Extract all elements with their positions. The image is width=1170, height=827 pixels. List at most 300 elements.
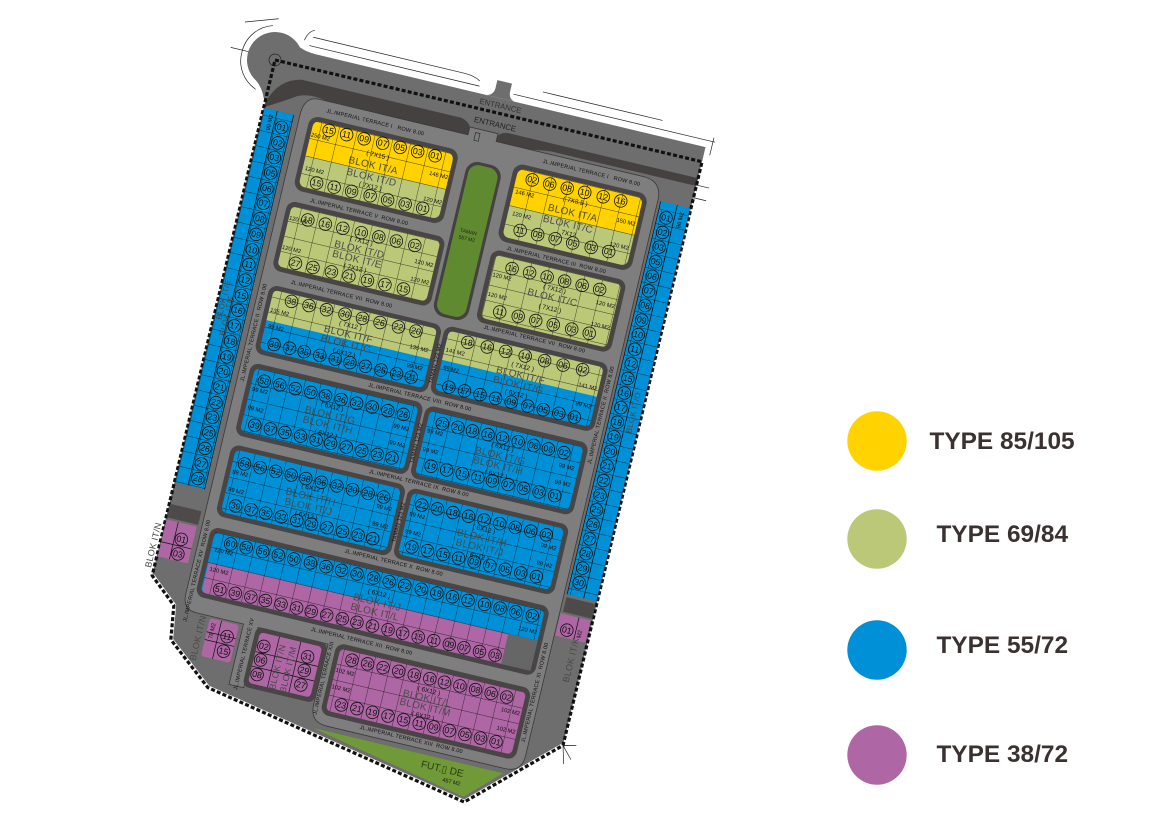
lot numbers: 02	[540, 529, 552, 541]
block: IT/A and IT/C upper right: BLOK IT/A	[547, 202, 598, 225]
lot numbers	[249, 639, 315, 693]
block: IT/A and IT/C upper right: 150 M2	[616, 218, 636, 228]
small block: IT/N lower left: BLOK IT/N	[188, 614, 208, 662]
right strip lot numbers: 10	[632, 329, 644, 341]
road labels: JL.IMPERIAL TERRACE III ROW 8.00	[506, 246, 606, 275]
lot numbers	[246, 374, 411, 466]
block: IT/G and IT/H right: 99 M2	[422, 447, 439, 456]
lot numbers: 29	[344, 357, 356, 369]
lot numbers: 08	[470, 684, 482, 696]
lot numbers: 10	[579, 186, 591, 198]
lot numbers: 06	[485, 687, 497, 699]
legend: type 55/72	[847, 620, 1068, 680]
block: IT/H and IT/J right: 99 M2	[540, 543, 557, 552]
lot numbers: 23	[352, 529, 364, 541]
legend: type 55/72: TYPE 55/72	[936, 632, 1068, 659]
left strip lot numbers: 18	[225, 335, 237, 347]
small block: IT/K right	[545, 613, 591, 684]
lot numbers: 20	[452, 421, 464, 433]
lot numbers: 16	[506, 263, 518, 275]
central park: TAMAN	[459, 228, 478, 237]
block: IT/F and IT/G right: ( 7X12 )	[510, 361, 535, 373]
small block: IT/N lower middle: BLOK IT/M	[278, 646, 298, 694]
left strip lot numbers: 26	[199, 442, 211, 454]
lot numbers: 20	[431, 503, 443, 515]
block: IT/L and IT/M bottom: 102 M2	[331, 684, 351, 695]
block: IT/D and IT/E: BLOK IT/E	[331, 249, 383, 271]
lot numbers: 15	[474, 389, 486, 401]
lot numbers: 52	[270, 465, 282, 477]
lot numbers: 36	[315, 476, 327, 488]
lot numbers: 23	[326, 266, 337, 278]
lot numbers: 07	[364, 190, 376, 202]
block: IT/H and IT/J right: BLOK IT/J	[454, 537, 504, 559]
block: IT/G and IT/H left: 99 M2	[247, 405, 264, 415]
lot numbers: 37	[245, 504, 257, 516]
lot numbers: 03	[489, 649, 501, 661]
lot numbers	[441, 333, 593, 425]
block: IT/H and IT/J right: 99 M2	[536, 560, 553, 570]
curb lines outside site	[222, 9, 724, 201]
lot numbers: 09	[486, 475, 498, 487]
lot numbers: 09	[346, 185, 358, 197]
block: IT/L and IT/M bottom: 102 M2	[335, 668, 355, 678]
lot numbers: 27	[321, 609, 333, 621]
lot numbers: 18	[408, 669, 420, 681]
lot numbers: 26	[362, 658, 374, 670]
block: IT/A and IT/D upper left: 146 M2	[428, 171, 449, 181]
road labels: JL.IMPERIAL TERRACE II ROW 8.00	[240, 283, 269, 382]
lot numbers: 11	[341, 129, 352, 141]
lot numbers: 21	[405, 371, 417, 383]
lot numbers: 03	[412, 146, 424, 158]
lot numbers	[212, 536, 540, 669]
lot numbers: 03	[585, 241, 597, 253]
long block: IT/J and IT/L: 120 M2	[517, 626, 538, 636]
legend: type 69/84	[847, 509, 1068, 569]
block: IT/G and IT/H left: BLOK IT/G	[304, 405, 356, 427]
block: IT/A and IT/C upper right: 7X12	[560, 229, 577, 240]
right strip lot numbers	[572, 210, 674, 590]
lot numbers: 56	[257, 546, 269, 558]
lot numbers	[266, 292, 429, 385]
block: IT/A and IT/D upper left: 120 M2	[304, 166, 324, 176]
block: IT/H and IT/J right: BLOK IT/H	[456, 527, 508, 550]
block: IT/L and IT/M bottom: BLOK IT/L	[402, 688, 452, 710]
central park: 557 M2	[458, 234, 476, 244]
lot numbers: 09	[428, 721, 440, 733]
small block: IT/N lower middle	[243, 627, 327, 702]
lot numbers: 07	[458, 642, 470, 654]
lot numbers: 11	[494, 306, 505, 318]
left strip lot numbers: 28	[192, 473, 204, 485]
road labels: JL.IMPERIAL TERRACE XI ROW 8.00	[521, 642, 550, 743]
block: IT/F and IT/G left: BLOK IT/F	[323, 324, 374, 346]
lot numbers: 15	[398, 283, 409, 295]
left strip lot numbers: 01	[276, 121, 288, 133]
lot numbers: 26	[374, 316, 386, 329]
future park	[306, 728, 503, 804]
lot numbers: 09	[505, 396, 517, 408]
block: IT/G and IT/H left	[235, 363, 423, 475]
block: IT/F and IT/G left: ( 6X12 )	[332, 347, 356, 360]
road labels: JL.IMPERIAL TERRACE I ROW 8.00	[542, 159, 641, 188]
lot numbers: 18	[431, 587, 443, 599]
block: IT/A and IT/D upper left: 120 M2	[422, 196, 443, 207]
lot numbers: 12	[497, 432, 509, 444]
lot numbers: 31	[291, 515, 303, 527]
lot numbers: 11	[414, 718, 425, 729]
block: IT/H and IT/J right	[393, 488, 569, 595]
lot numbers: 08	[509, 521, 521, 533]
long block: IT/J and IT/L: BLOK IT/L	[349, 602, 400, 624]
lot numbers: 25	[307, 261, 319, 273]
lot numbers: 37	[245, 591, 257, 603]
lot numbers: 32	[331, 480, 343, 492]
lot numbers: 36	[335, 394, 347, 406]
small block: IT/N lower left: 78 M2	[208, 623, 218, 640]
lot numbers: 19	[382, 624, 394, 636]
lot numbers: 39	[229, 587, 241, 599]
left strip lot numbers: 03	[268, 152, 280, 164]
long block: IT/J and IT/L	[196, 527, 550, 676]
lot numbers: 07	[530, 315, 542, 327]
block: IT/L and IT/M bottom: ( 6X12 )	[417, 685, 441, 697]
lot numbers: 06	[255, 654, 267, 666]
legend: type 85/105	[847, 411, 1075, 471]
lot numbers: 01	[417, 202, 429, 214]
lot numbers: 09	[512, 310, 524, 322]
lot numbers: 37	[284, 342, 296, 354]
lot numbers: 03	[475, 732, 486, 744]
lot numbers: 29	[325, 437, 337, 449]
lot numbers: 07	[484, 560, 496, 572]
lot numbers: 11	[515, 225, 526, 236]
block: IT/D and IT/E: 120 M2	[409, 276, 430, 287]
road labels: JL.IMPERIAL TERRACE XV	[233, 617, 256, 691]
lot number: 01	[561, 624, 573, 636]
entrance labels: ENTRANCE	[473, 115, 517, 134]
right strip lot numbers: 20	[605, 445, 616, 457]
lot numbers: 30	[366, 401, 378, 413]
left lots strip type 55/72: BLOK IT/F	[218, 295, 236, 337]
block: IT/A and IT/C upper right: 120 M2	[609, 242, 629, 252]
block: IT/C and IT/E right: 120 M2	[492, 272, 512, 283]
lot numbers: 32	[336, 564, 348, 576]
left strip lot numbers: 02	[272, 137, 284, 149]
road labels: JL.IMPERIAL TERRACE XII ROW 8.00	[310, 627, 413, 657]
site ground	[91, 22, 709, 821]
block: IT/H and IT/J left	[216, 445, 406, 556]
right strip lot numbers: 05	[650, 256, 662, 268]
lot numbers: 52	[289, 383, 301, 395]
block: IT/H and IT/J left: 99 M2	[371, 521, 388, 531]
right strip lot numbers: 01	[660, 212, 672, 224]
lot numbers: 33	[295, 430, 307, 442]
lot numbers: 31	[291, 602, 303, 614]
lot numbers: 08	[494, 602, 506, 614]
lot numbers: 38	[304, 557, 316, 569]
left lots strip type 55/72: 90 M2	[266, 114, 275, 131]
lot numbers: 11	[472, 471, 483, 483]
right strip lot numbers: 08	[639, 299, 651, 311]
long block: IT/J and IT/L: 120 M2	[213, 547, 234, 558]
left strip lot numbers: 12	[239, 274, 251, 286]
right strip lot numbers: 09	[636, 314, 648, 326]
right strip lot numbers: 26	[587, 518, 599, 530]
block: IT/H and IT/J left: BLOK IT/J	[283, 496, 333, 518]
left strip lot numbers	[190, 120, 289, 486]
left strip lot numbers: 10	[246, 244, 258, 256]
lot numbers: 08	[251, 669, 263, 681]
lot numbers: 28	[382, 405, 394, 417]
lot numbers: 01	[490, 736, 502, 748]
right strip lot numbers: 29	[577, 562, 589, 574]
lot numbers: 05	[499, 563, 511, 575]
lot numbers: 39	[249, 419, 261, 431]
right strip lot numbers: 21	[601, 460, 613, 472]
block: IT/H and IT/J right: ( 6X12 )	[465, 551, 489, 563]
lot numbers: 39	[230, 500, 242, 512]
dark band right of entrance	[492, 130, 698, 197]
block: IT/H and IT/J right: 99 M2	[404, 529, 421, 539]
lot numbers: 56	[254, 462, 266, 474]
lot numbers: 03	[399, 198, 411, 210]
road labels: JL.IMPERIAL TERRACE VII ROW 8.00	[483, 325, 586, 355]
central park	[431, 159, 503, 322]
lot numbers: 21	[343, 270, 355, 282]
block: IT/D and IT/E: 120 M2	[288, 216, 308, 226]
lot numbers: 02	[258, 640, 270, 652]
block: IT/F and IT/G right: 141 M2	[445, 348, 465, 358]
dark gaps at strip ends	[167, 503, 596, 619]
lot numbers: 06	[390, 235, 402, 247]
site plan	[73, 9, 724, 824]
lot numbers: 11	[490, 392, 501, 404]
lot numbers: 11	[329, 181, 340, 193]
left lots strip type 55/72: BLOK IT/E	[214, 279, 233, 321]
site boundary	[118, 60, 702, 821]
block: IT/D and IT/E	[272, 201, 445, 306]
left strip lot numbers: 22	[210, 397, 222, 409]
lot numbers: 35	[260, 507, 272, 519]
lot numbers: 23	[371, 448, 383, 460]
legend: type 69/84: TYPE 69/84	[936, 521, 1068, 548]
lot numbers: 18	[462, 336, 474, 348]
road labels: JL.IMPERIAL TERRACE VIII ROW 8.00	[368, 383, 472, 413]
block: IT/F and IT/G left: 135 M2	[409, 344, 429, 354]
lot numbers: 06	[544, 178, 556, 190]
lot numbers: 19	[443, 381, 455, 393]
block: IT/A and IT/C upper right: BLOK IT/C	[542, 214, 594, 236]
block: IT/G and IT/H right: 99 M2	[426, 428, 443, 438]
block: IT/A and IT/C upper right	[497, 164, 648, 271]
lot numbers: 09	[443, 638, 455, 650]
lot numbers: 38	[320, 390, 332, 402]
block: IT/D and IT/E: BLOK IT/D	[333, 239, 385, 261]
block: IT/D and IT/E: 120 M2	[281, 245, 302, 255]
left strip lot numbers: 11	[243, 259, 255, 270]
lot numbers: 08	[539, 355, 551, 367]
right strip lot numbers: 19	[608, 431, 620, 443]
block: IT/F and IT/G right: BLOK IT/G	[492, 374, 545, 397]
lot numbers: 19	[406, 541, 418, 553]
left strip lot numbers: 16	[232, 304, 244, 316]
block: IT/H and IT/J right: 99 M2	[409, 512, 426, 521]
lot numbers	[424, 416, 572, 503]
lot numbers: 29	[298, 664, 310, 676]
small block: IT/N upper left: BLOK IT/N	[143, 521, 164, 569]
right lots strip type 55/72	[567, 201, 690, 601]
lot numbers: 58	[240, 542, 252, 554]
long block: IT/J and IT/L: BLOK IT/J	[352, 592, 402, 614]
block: IT/F and IT/G right: 141 M2	[578, 382, 598, 393]
lot numbers: 05	[474, 645, 486, 658]
lot numbers: 15	[323, 124, 335, 136]
lot numbers: 05	[382, 194, 394, 206]
right strip lot numbers: 30	[573, 577, 585, 589]
lot numbers: 15	[311, 177, 323, 189]
lot numbers: 28	[357, 312, 369, 324]
block: IT/G and IT/H left: 99 M2	[389, 440, 406, 450]
lot numbers: 03	[533, 486, 545, 498]
block: IT/H and IT/J left: 99 M2	[227, 487, 244, 496]
lot numbers: 58	[239, 458, 251, 470]
lot numbers: 23	[391, 368, 403, 380]
lot numbers: 35	[279, 426, 291, 438]
road labels: JL.IMPERIAL TERRACE IX ROW 8.00	[368, 469, 469, 499]
lot numbers: 51	[214, 584, 226, 596]
lot numbers: 30	[339, 308, 351, 320]
right strip lot numbers: 23	[594, 489, 606, 501]
block: IT/C and IT/E right: ( 7X12 )	[538, 303, 562, 315]
lot numbers: 28	[362, 487, 374, 499]
small block: IT/K right: M2	[576, 630, 584, 639]
lot numbers: 30	[347, 484, 359, 496]
lot numbers: 25	[375, 364, 387, 376]
block: IT/D and IT/E: 120 M2	[414, 259, 434, 269]
right strip lot numbers: 12	[625, 358, 637, 370]
block: IT/H and IT/J left: ( 6X12 )	[294, 510, 318, 522]
lot numbers	[492, 261, 607, 341]
legend: type 38/72: TYPE 38/72	[936, 741, 1068, 768]
lot numbers: 10	[454, 680, 466, 692]
block: IT/F and IT/G right: ( 6X12 )	[504, 388, 528, 401]
road labels: JL.IMPERIAL TERRACE XIII	[312, 641, 336, 715]
lot numbers: 39	[268, 339, 280, 351]
lot numbers: 25	[356, 445, 368, 457]
lot numbers: 05	[537, 404, 549, 416]
left strip lot numbers: 20	[217, 366, 229, 378]
block: IT/C and IT/E right	[476, 250, 626, 352]
block: IT/L and IT/M bottom: 102 M2	[496, 726, 516, 736]
right lots strip type 55/72: BLOK IT/O	[624, 391, 643, 434]
lot numbers: 17	[422, 545, 433, 557]
right strip lot numbers: 28	[580, 548, 592, 560]
lot numbers: 08	[373, 231, 385, 243]
block: IT/G and IT/H left: BLOK IT/H	[302, 414, 354, 437]
block: IT/F and IT/G left: 135 M2	[269, 308, 290, 318]
lot numbers: 12	[500, 345, 512, 357]
lot numbers: 23	[335, 699, 347, 711]
lot numbers: 07	[443, 725, 455, 737]
small block: IT/N upper left	[143, 517, 197, 576]
lot numbers: 28	[346, 654, 358, 666]
block: IT/D and IT/E: ( 7X12 )	[349, 235, 373, 248]
block: IT/A and IT/C upper right: ( 7X8.5 )	[562, 196, 588, 208]
right strip lot numbers: 27	[584, 533, 596, 545]
lot numbers: 58	[258, 375, 270, 387]
lot numbers: 11	[453, 552, 464, 564]
right strip lot numbers: 25	[591, 504, 603, 516]
block: IT/C and IT/E right: 120 M2	[487, 292, 507, 302]
block: IT/G and IT/H right: BLOK IT/G	[474, 445, 527, 468]
road labels: JL.IMPERIAL TERRACE XIII ROW 8.00	[359, 725, 463, 755]
block: IT/G and IT/H right	[410, 406, 589, 515]
lot numbers	[227, 456, 391, 547]
lot numbers: 10	[541, 271, 553, 283]
lot numbers: 15	[456, 468, 468, 480]
lot numbers: 27	[290, 257, 301, 269]
lot numbers: 01	[175, 533, 187, 545]
lot numbers: 01	[583, 327, 595, 339]
lot numbers: 16	[447, 591, 458, 603]
block: IT/L and IT/M bottom: ( 6X12 )	[411, 711, 435, 723]
lot numbers: 50	[285, 469, 297, 481]
road labels: TAMAN 123 M2	[428, 343, 444, 384]
lot numbers	[334, 653, 514, 749]
lot numbers: 02	[594, 283, 606, 296]
block: IT/G and IT/H right: BLOK IT/H	[472, 455, 524, 477]
lot numbers: 06	[542, 443, 554, 455]
block: IT/F and IT/G right: BLOK IT/F	[495, 365, 546, 387]
lot numbers: 12	[478, 514, 490, 526]
future park: FUT.▯ DE	[420, 759, 465, 780]
lot numbers: 27	[340, 441, 352, 453]
lot numbers: 21	[367, 620, 379, 632]
entrance gate marker	[474, 132, 480, 141]
lot numbers	[404, 498, 554, 584]
lot numbers: 26	[378, 491, 390, 503]
lot numbers: 38	[300, 473, 312, 485]
block: IT/F and IT/G right	[430, 326, 608, 432]
block: IT/G and IT/H right: 99 M2	[554, 479, 571, 489]
block: IT/G and IT/H left: 99 M2	[251, 387, 268, 396]
lot numbers: 05	[518, 482, 530, 494]
lot numbers: 50	[305, 386, 317, 398]
entrance labels: ENTRANCE	[479, 97, 522, 115]
lot numbers: 10	[479, 598, 491, 610]
left strip lot numbers: 19	[221, 351, 233, 363]
left strip lot numbers: 08	[254, 213, 266, 225]
lot numbers: 33	[275, 511, 287, 523]
lot numbers: 19	[425, 460, 437, 472]
lot numbers: 32	[321, 304, 333, 316]
road labels: JL.IMPERIAL TERRACE I ROW 8.00	[326, 108, 425, 137]
left strip lot numbers: 23	[207, 411, 219, 423]
right strip lot numbers: 16	[618, 387, 630, 399]
lot numbers: 21	[386, 452, 398, 464]
lot numbers: 32	[351, 397, 363, 409]
right strip lot numbers: 15	[622, 372, 634, 384]
lot numbers: 16	[481, 341, 493, 353]
lot numbers: 01	[530, 571, 542, 583]
left strip lot numbers: 27	[195, 458, 207, 470]
lot numbers: 17	[397, 627, 409, 639]
lot numbers: 22	[416, 499, 428, 511]
lot numbers: 16	[615, 195, 627, 207]
road labels: JL.IMPERIAL TERRACE II ROW 8.00	[587, 366, 616, 465]
